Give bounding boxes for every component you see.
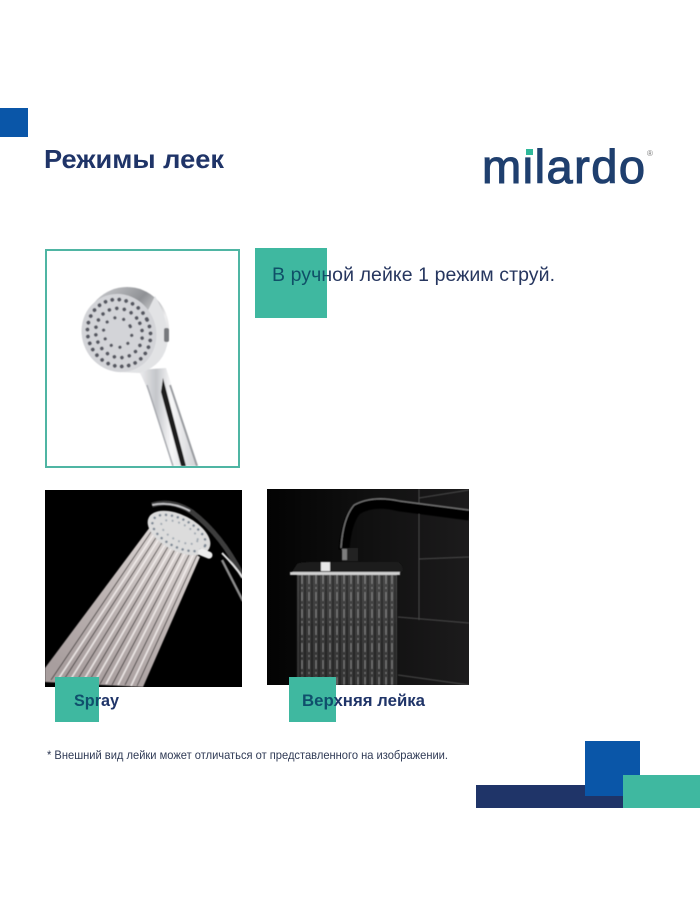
shower face [146, 510, 212, 556]
label: spray [55, 677, 120, 722]
head plate [292, 562, 402, 572]
photo: spray mode [45, 490, 243, 687]
wall tile lines [398, 489, 469, 685]
water [297, 575, 397, 685]
label: overhead shower: Верхняя лейка [302, 691, 426, 710]
title: Режимы леек [44, 144, 225, 174]
logo: milardo: milardo [482, 140, 645, 193]
decorative block composition [476, 741, 700, 808]
footnote: * Внешний вид лейки может отличаться от представленного на изображении. [47, 748, 448, 762]
spray jets [45, 527, 200, 687]
body text: В ручной лейке 1 режим струй. [272, 264, 555, 286]
tab [198, 548, 214, 560]
handle [152, 503, 243, 577]
corner accent square [0, 108, 28, 137]
photo: overhead shower [267, 489, 469, 685]
connector [342, 548, 358, 561]
logo: milardo: ® [647, 149, 653, 158]
teal accent square behind text [255, 248, 327, 318]
icon: hand shower head [81, 286, 198, 466]
label: spray: Spray [74, 691, 120, 710]
label: overhead shower [289, 677, 426, 722]
panel: hand shower photo frame [46, 250, 239, 467]
shower arm [344, 503, 469, 550]
